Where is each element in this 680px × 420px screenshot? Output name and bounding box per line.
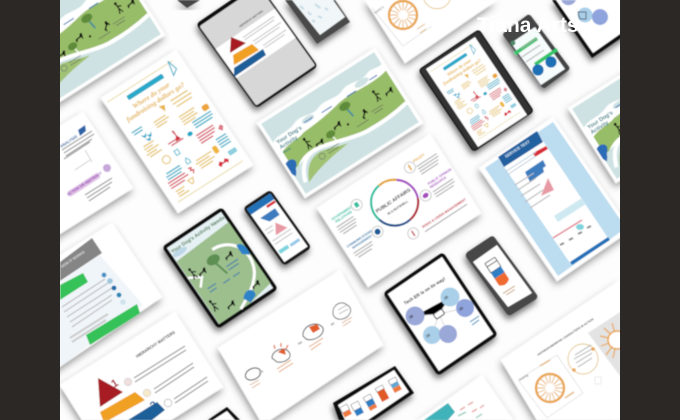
analysis card contents [59, 125, 112, 201]
panel: tablet with hierarchy pyramid [196, 0, 318, 108]
panel: phone with green bars [502, 14, 571, 89]
panel: phone with vial [466, 236, 537, 315]
ribbon card contents [60, 238, 143, 365]
panel: tablet with flyer [419, 30, 533, 151]
map heading: Your Dog's Activity Needs [170, 215, 226, 255]
panel: map card bottom [419, 375, 513, 420]
wheel card contents: SAFETY [373, 5, 385, 15]
panel: anthropomorphic characters card [501, 280, 620, 420]
phone screen [338, 370, 409, 420]
tablet screen [556, 0, 640, 53]
report page [498, 131, 610, 265]
panel: right edge landscape card [568, 33, 680, 183]
tech ER circles: 25 [443, 295, 449, 301]
tablet screen: HIERARCHY MATTERS [238, 9, 264, 28]
framed wheel [518, 355, 583, 418]
public opinion research: PUBLIC OPINION [427, 167, 453, 186]
wheel card contents [372, 0, 450, 46]
panel: centre landscape dog activity card [257, 48, 423, 198]
panel: right edge landscape card: Your Dog's [587, 110, 614, 131]
policy: POLICY [412, 152, 426, 163]
green bar [60, 273, 88, 300]
gray side panel with sun [588, 312, 620, 376]
watermark: Tiana Arts [477, 14, 579, 37]
panel: public affairs card: RESEARCH [429, 175, 448, 189]
phone screen [473, 245, 532, 307]
panel: phone with vials, bottom [333, 366, 414, 420]
card contents [518, 312, 626, 418]
panel: landscape dog activity card, top left [0, 0, 165, 110]
flyer heading: Where do your [131, 81, 172, 110]
government relations: GOVERNMENT [331, 204, 354, 222]
vial graphic [484, 257, 516, 296]
right dark side panel [620, 0, 680, 420]
panel: card with green ribbons [40, 223, 162, 380]
hierarchy pyramid: 2 [129, 391, 141, 405]
outline circle with text [568, 344, 598, 374]
panel: tablet tech ER [383, 252, 498, 376]
phone screen [511, 27, 565, 85]
report page: SERVICE TEXT [504, 139, 531, 159]
flyer screen [426, 37, 527, 147]
tech ER circles: 26 [458, 306, 464, 312]
analysis card contents: ANALYSIS [59, 134, 78, 149]
tech ER circles: 38 [408, 314, 414, 320]
green ribbon [86, 304, 140, 345]
risks and crisis: RISKS & CRISIS MANAGEMENT [421, 197, 468, 229]
card heading: Your Dog's [276, 125, 303, 146]
panel: small tablet bottom [208, 407, 240, 420]
gray header [60, 238, 102, 281]
ring heading: PUBLIC AFFAIRS [375, 187, 413, 215]
panel: landscape dog activity card, top left: Your Dog's [18, 39, 43, 58]
panel: public affairs card: RELATIONS [335, 209, 354, 224]
panel: public affairs card: MANAGEMENT [351, 234, 373, 250]
tech ER circles: 25 [425, 333, 431, 339]
blue circles [561, 0, 608, 25]
pyramid graphic [230, 37, 266, 77]
panel: centre landscape dog activity card: Activity [279, 135, 300, 151]
panel: fundraising flyer: fundraising dollars go? [125, 81, 187, 124]
panel: cloud characters card [218, 270, 383, 420]
panel: right edge landscape card: Activity [590, 120, 611, 136]
panel: centre landscape dog activity card: Needs [282, 146, 292, 154]
panel: public affairs card: IN A NUTSHELL [387, 199, 409, 216]
panel: partial dark tablet at top [177, 0, 200, 8]
panel: landscape dog activity card, top left: Activity [21, 48, 39, 63]
analysis card contents: ACTION OR ABSTRACT [66, 171, 103, 197]
flyer screen: fundraising dollars go? [443, 58, 483, 87]
panel: tablet with tech circles top right [552, 0, 650, 58]
map dots [300, 4, 328, 22]
phone map screen [292, 0, 345, 35]
cloud characters [243, 303, 352, 388]
panel: hierarchy matters card [60, 312, 223, 420]
tech ER circles [406, 288, 479, 344]
panel: fundraising flyer [101, 50, 253, 213]
card heading: ANTHROPOMORPHIC CHARACTERS IN ACTION [536, 317, 594, 357]
left dark side panel [0, 0, 60, 420]
ring chart [363, 170, 427, 235]
hierarchy pyramid: 1 [109, 377, 121, 391]
hierarchy pyramid [98, 346, 208, 420]
tech ER heading: Tech ER is on its way! [403, 276, 447, 306]
map card contents [424, 402, 484, 420]
panel: tablet with dog activity map [162, 207, 278, 329]
card contents: hearing [518, 373, 529, 382]
flyer screen: Where do your [446, 58, 473, 78]
panel: public affairs card [317, 134, 481, 287]
vial row [340, 377, 402, 418]
panel: wheel card top centre [365, 0, 497, 63]
hierarchy pyramid: 3 [148, 399, 160, 413]
hierarchy heading: HIERARCHY MATTERS [135, 330, 176, 359]
panel: left card analysis [40, 112, 133, 240]
panel: phone with blue report [243, 190, 311, 266]
ribbon card contents: HOW IT WORKS [60, 250, 86, 269]
communications: COMMUNICATIONS [346, 229, 373, 249]
panel: long service report card [479, 117, 631, 281]
panel: phone with map at top [285, 0, 350, 44]
map [174, 222, 274, 324]
